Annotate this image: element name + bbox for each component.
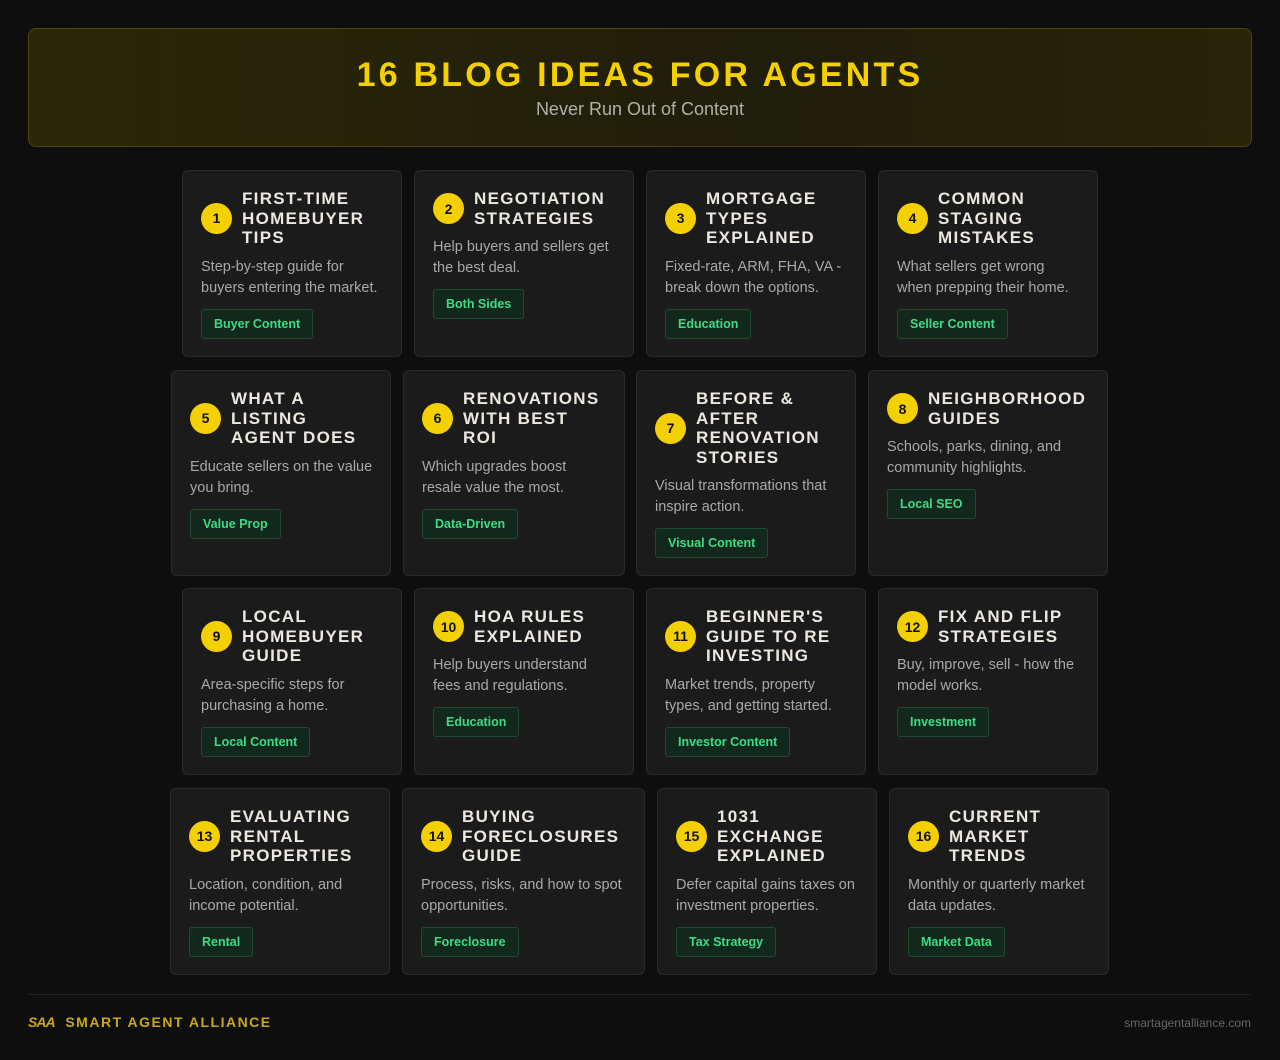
card 2 [414,170,634,357]
card 16: 16 [916,828,931,844]
card 14: Process, risks, and how to spot opportunities. [421,876,622,914]
card 9: 9 [213,628,220,644]
card 6: Which upgrades boost resale value the most. [422,458,566,496]
card 6: 6 [434,410,441,426]
card 6: RENOVATIONS WITH BEST ROI [463,389,599,447]
card 15: Tax Strategy [689,934,763,948]
card 13: Rental [202,934,240,948]
card 6: Data-Driven [435,516,505,530]
card 11: Investor Content [678,734,777,748]
card 16 [889,788,1109,975]
card 4: 4 [909,210,916,226]
title: 16 BLOG IDEAS FOR AGENTS [357,56,923,94]
card 13: Location, condition, and income potential. [189,876,342,914]
card 10: Education [446,715,506,729]
card 4: COMMON STAGING MISTAKES [938,189,1035,247]
card 8: Local SEO [900,497,963,511]
card 9 [182,588,402,775]
card 5 [171,370,391,576]
card 3: Education [678,316,738,330]
card 4: What sellers get wrong when prepping their home. [897,258,1069,296]
card 1: Step-by-step guide for buyers entering the market. [201,258,378,296]
card 14: Foreclosure [434,934,506,948]
card 6 [403,370,625,576]
card 2: 2 [445,200,452,216]
footer url: smartagentalliance.com [1124,1016,1251,1030]
card 15: 15 [684,828,699,844]
card 5: Value Prop [203,516,268,530]
card 7 [636,370,856,576]
card 12 [878,588,1098,775]
card 15: 1031 EXCHANGE EXPLAINED [717,807,826,865]
card 8 [868,370,1108,576]
card 9: Area-specific steps for purchasing a home. [201,676,344,714]
card 15: Defer capital gains taxes on investment properties. [676,876,855,914]
card 16: Market Data [921,934,992,948]
card 8: NEIGHBORHOOD GUIDES [928,389,1086,428]
card 14: BUYING FORECLOSURES GUIDE [462,807,619,865]
card 2: Both Sides [446,297,511,311]
card 12: 12 [905,618,920,634]
card 16: Monthly or quarterly market data updates. [908,876,1084,914]
card 7: BEFORE & AFTER RENOVATION STORIES [696,389,820,466]
card 8: 8 [899,400,906,416]
card 10: HOA RULES EXPLAINED [474,607,585,646]
card 5: WHAT A LISTING AGENT DOES [231,389,356,447]
card 15 [657,788,877,975]
card 11 [646,588,866,775]
card 3: MORTGAGE TYPES EXPLAINED [706,189,817,247]
card 1 [182,170,402,357]
subtitle: Never Run Out of Content [536,99,744,119]
card 11: 11 [673,628,688,644]
card 12: FIX AND FLIP STRATEGIES [938,607,1062,646]
card 10 [414,588,634,775]
card 12: Investment [910,715,976,729]
card 16: CURRENT MARKET TRENDS [949,807,1041,865]
card 4 [878,170,1098,357]
card 1: FIRST-TIME HOMEBUYER TIPS [242,189,364,247]
card 13 [170,788,390,975]
card 7: 7 [667,420,674,436]
header banner [28,28,1252,147]
card 13: EVALUATING RENTAL PROPERTIES [230,807,353,865]
card 1: 1 [213,210,220,226]
card 14: 14 [429,828,444,844]
card 10: 10 [441,618,456,634]
card 11: BEGINNER'S GUIDE TO RE INVESTING [706,607,831,665]
card 5: Educate sellers on the value you bring. [190,458,372,496]
card 10: Help buyers understand fees and regulations. [433,657,587,694]
card 3 [646,170,866,357]
card 7: Visual Content [668,536,755,550]
card 3: 3 [677,210,684,226]
card 1: Buyer Content [214,316,300,330]
card 14 [402,788,645,975]
card 4: Seller Content [910,316,995,330]
card 11: Market trends, property types, and getting started. [665,676,832,714]
card 12: Buy, improve, sell - how the model works. [897,657,1074,694]
card 7: Visual transformations that inspire action. [655,478,826,515]
footer logo: SAA SMART AGENT ALLIANCE [28,1014,272,1030]
card 9: Local Content [214,734,297,748]
card 3: Fixed-rate, ARM, FHA, VA - break down the options. [665,258,841,296]
card 13: 13 [197,828,212,844]
card 8: Schools, parks, dining, and community highlights. [887,439,1061,476]
card 2: NEGOTIATION STRATEGIES [474,189,605,228]
card 2: Help buyers and sellers get the best deal. [433,239,609,276]
card 5: 5 [202,410,209,426]
card 9: LOCAL HOMEBUYER GUIDE [242,607,364,665]
